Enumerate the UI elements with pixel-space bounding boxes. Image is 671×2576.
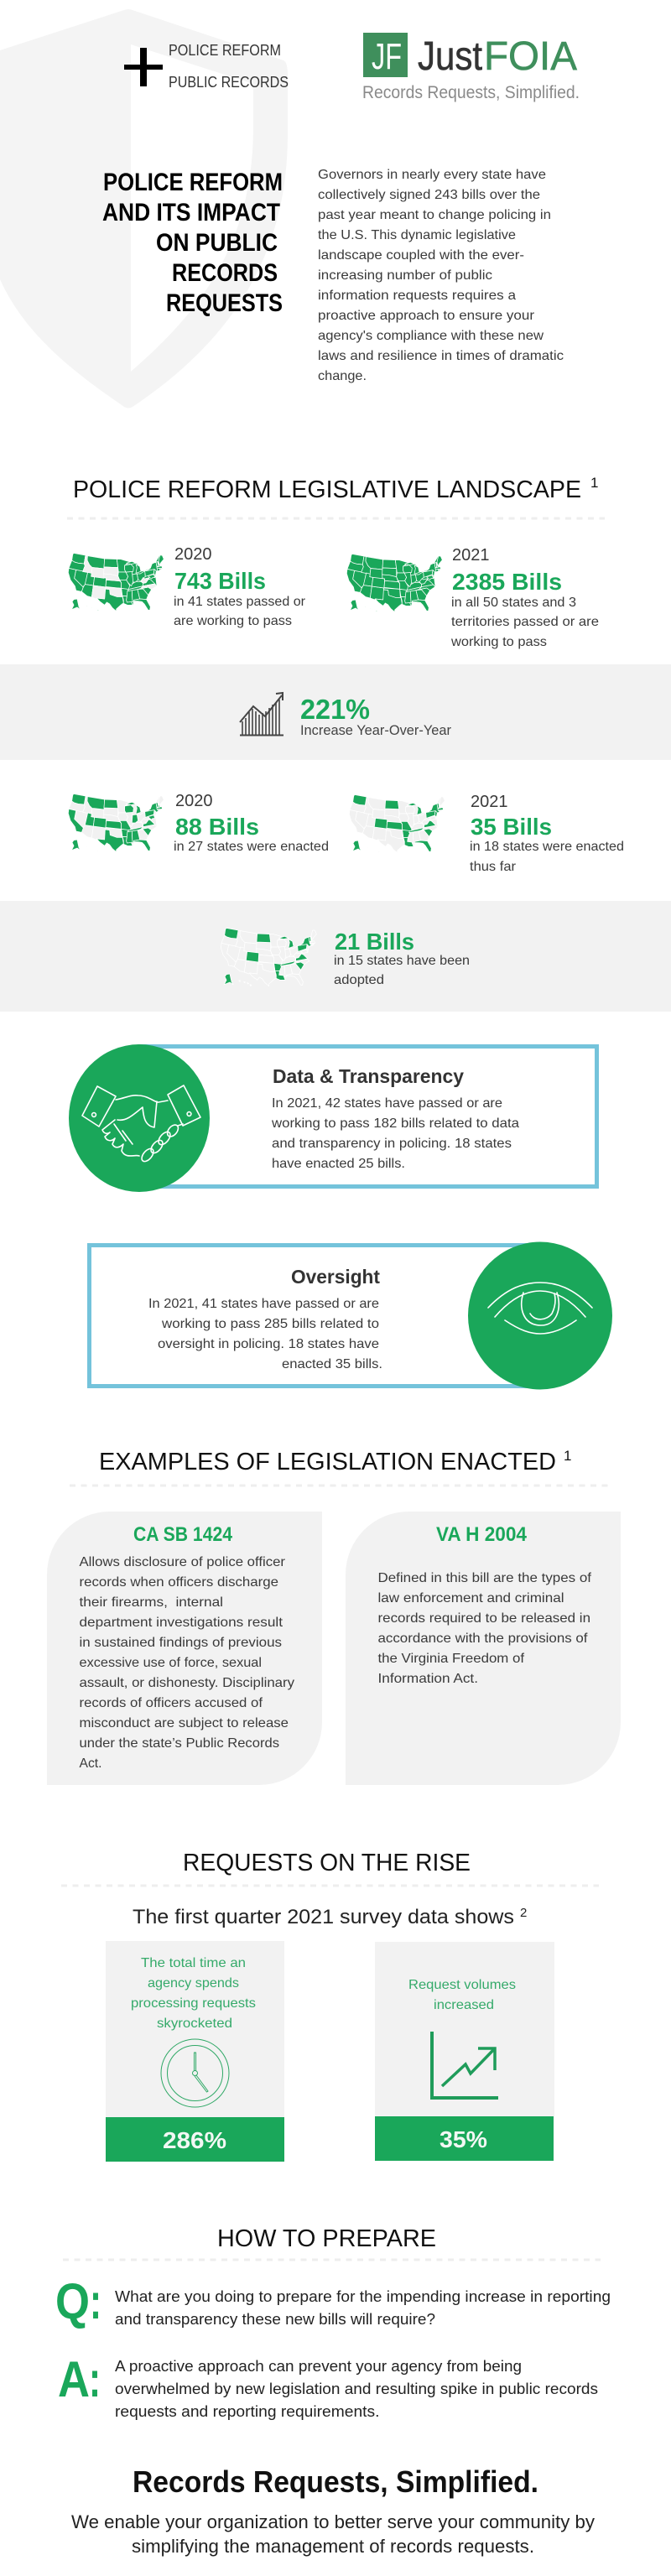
card text [79, 1555, 294, 1771]
intro text: landscape coupled with the ever- [318, 248, 524, 263]
icon: plus [124, 48, 163, 86]
icon: A letter: A [58, 2351, 90, 2407]
answer [58, 2351, 598, 2420]
card text: their firearms, internal [79, 1595, 223, 1610]
card text: records of officers accused of [79, 1696, 263, 1710]
title: POLICE REFORM [103, 169, 283, 196]
heading: Data & Transparency [273, 1065, 464, 1087]
value: 221% [300, 694, 370, 725]
value: 88 Bills [175, 814, 259, 840]
tagline: Records Requests, Simplified. [133, 2464, 538, 2499]
closing text [71, 2511, 595, 2557]
icon: Q letter: : [90, 2273, 101, 2329]
closing text: simplifying the management of records requests. [132, 2536, 534, 2557]
intro text: increasing number of public [318, 268, 492, 283]
card text: The total time an [141, 1956, 246, 1970]
card heading: CA SB 1424 [133, 1523, 233, 1546]
answer text: overwhelmed by new legislation and resulting spike in public records [115, 2381, 598, 2397]
value: 35% [440, 2126, 487, 2152]
subheading: survey data: 2 [520, 1906, 527, 1920]
closing statement [71, 2464, 595, 2557]
question text [115, 2288, 611, 2328]
card text: assault, or dishonesty. Disciplinary [79, 1676, 294, 1690]
card: CA SB 1424 [47, 1512, 322, 1785]
intro text: the U.S. This dynamic legislative [318, 228, 516, 242]
description: adopted [334, 973, 384, 987]
description: in 15 states have been [334, 954, 470, 968]
value: 743 Bills [174, 568, 266, 594]
card heading: VA H 2004 [436, 1523, 528, 1546]
card text: Defined in this bill are the types of [377, 1571, 592, 1585]
title: REQUESTS [166, 289, 283, 317]
tagline: Records Requests, Simplified. [362, 83, 580, 102]
description: In 2021, 41 states have passed or are [148, 1297, 379, 1311]
card text: department investigations result [79, 1616, 283, 1630]
icon: Q letter: Q [55, 2273, 90, 2329]
answer text: A proactive approach can prevent your agency from being [115, 2358, 522, 2375]
card text: skyrocketed [157, 2017, 232, 2031]
closing text: We enable your organization to better serve your community by [71, 2511, 595, 2532]
card text: Request volumes [408, 1978, 516, 1992]
label: public records: PUBLIC RECORDS [169, 74, 289, 91]
description: are working to pass [174, 614, 292, 628]
description: enacted 35 bills. [282, 1357, 382, 1371]
value: 286% [163, 2127, 226, 2153]
heading: requests on the rise: REQUESTS ON THE RISE [183, 1850, 471, 1876]
description: and transparency in policing. 18 states [272, 1137, 512, 1151]
title: RECORDS [172, 259, 278, 287]
intro text: agency's compliance with these new [318, 329, 544, 343]
description: in 18 states were enacted [470, 840, 624, 854]
wordmark: FOIA [484, 34, 577, 79]
card text: law enforcement and criminal [377, 1591, 564, 1605]
map: 2021 enacted [349, 794, 445, 853]
intro text: laws and resilience in times of dramatic [318, 349, 564, 363]
heading: Oversight [291, 1266, 380, 1288]
year: 2021 [471, 793, 508, 811]
value: 21 Bills [335, 929, 414, 955]
heading: legislative landscape: POLICE REFORM LEGISLATIVE LANDSCAPE [73, 476, 581, 503]
wordmark [418, 34, 577, 79]
value: 2385 Bills [452, 569, 562, 595]
card text: the Virginia Freedom of [377, 1652, 525, 1666]
description: In 2021, 42 states have passed or are [272, 1096, 502, 1111]
intro text: information requests requires a [318, 289, 516, 303]
heading: examples of legislation [70, 1448, 608, 1486]
caption: Increase Year-Over-Year [300, 722, 451, 738]
question [55, 2273, 611, 2329]
heading: legislative landscape [67, 475, 605, 518]
card text: in sustained findings of previous [79, 1636, 282, 1650]
subheading: survey data: The first quarter 2021 survey data shows [133, 1906, 514, 1928]
background shield watermark [0, 9, 288, 408]
description: in all 50 states and 3 [451, 596, 576, 610]
description: in 41 states passed or [174, 595, 306, 609]
label: police reform: POLICE REFORM [169, 42, 281, 59]
intro text: proactive approach to ensure your [318, 309, 535, 323]
wordmark: Just [418, 34, 482, 79]
heading: examples of legislation: 1 [564, 1448, 571, 1464]
description [470, 840, 624, 874]
description: oversight in policing. 18 states have [158, 1337, 379, 1351]
question text: What are you doing to prepare for the impending increase in reporting [115, 2288, 611, 2305]
intro text: past year meant to change policing in [318, 208, 551, 222]
icon: growth chart [432, 2032, 498, 2098]
icon: handshake on green circle [69, 1044, 210, 1192]
heading: how to prepare: HOW TO PREPARE [217, 2225, 436, 2252]
answer text [115, 2358, 598, 2420]
card text: accordance with the provisions of [377, 1631, 588, 1646]
answer text: requests and reporting requirements. [115, 2403, 379, 2420]
title: AND ITS IMPACT [102, 199, 280, 226]
stat: 2021 enacted [349, 793, 624, 874]
card text: records when officers discharge [79, 1575, 278, 1590]
intro text: change. [318, 369, 367, 383]
description: working to pass 182 bills related to data [271, 1116, 519, 1131]
header: plus and topics [124, 42, 289, 91]
map: 2020 passed or working [68, 553, 164, 611]
description: working to pass [450, 635, 547, 649]
title [102, 169, 283, 317]
year: 2021 [452, 546, 490, 565]
logo square [363, 33, 408, 77]
map: 2021 passed or working [346, 554, 442, 612]
intro text: Governors in nearly every state have [318, 168, 546, 182]
card text: misconduct are subject to release [79, 1716, 289, 1730]
description: have enacted 25 bills. [272, 1157, 405, 1171]
description [271, 1096, 519, 1171]
description: thus far [470, 860, 517, 874]
icon: rising bar chart [240, 693, 283, 736]
map: adopted [221, 928, 316, 986]
year: 2020 [174, 545, 211, 564]
card text [131, 1956, 256, 2031]
question text: and transparency these new bills will require? [115, 2311, 435, 2328]
heading: legislative landscape: 1 [590, 475, 598, 491]
description [148, 1297, 382, 1371]
card text [377, 1571, 592, 1686]
card text: increased [434, 1998, 494, 2012]
stat card: request volumes [375, 1942, 554, 2161]
card text [408, 1978, 516, 2012]
title: ON PUBLIC [156, 229, 278, 257]
panel: oversight [89, 1241, 612, 1389]
icon: clock [161, 2039, 229, 2107]
icon: eye on green circle [468, 1241, 612, 1389]
map: 2020 enacted [68, 794, 164, 852]
card text: under the state’s Public Records [79, 1736, 279, 1751]
card text: Information Act. [377, 1672, 478, 1686]
card: VA H 2004 [346, 1512, 621, 1785]
card text: excessive use of force, sexual [79, 1656, 262, 1670]
description [334, 954, 470, 987]
card text: Act. [79, 1756, 102, 1771]
intro text: collectively signed 243 bills over the [318, 188, 540, 202]
logo square: JF [372, 36, 402, 77]
description [450, 596, 599, 649]
stat card: time spent processing [106, 1941, 284, 2162]
card text: records required to be released in [377, 1611, 590, 1626]
stat: 2021 proposed bills [346, 546, 599, 649]
card text: processing requests [131, 1996, 256, 2011]
panel: data and transparency [69, 1044, 597, 1192]
JustFOIA logo [362, 33, 580, 102]
description: working to pass 285 bills related to [161, 1317, 379, 1331]
card text: agency spends [148, 1976, 239, 1991]
year: 2020 [175, 792, 213, 810]
band: adopted bills [0, 901, 671, 1012]
intro text [318, 168, 564, 383]
description: territories passed or are [451, 615, 599, 629]
description [174, 595, 306, 628]
value: 35 Bills [471, 814, 552, 840]
description: in 27 states were enacted [174, 840, 329, 854]
stat: 2020 enacted [68, 792, 329, 854]
stat: 2020 proposed bills [68, 545, 306, 628]
band: year-over-year increase [0, 664, 671, 760]
heading: examples of legislation: EXAMPLES OF LEGISLATION ENACTED [99, 1449, 556, 1475]
icon: A letter: : [89, 2351, 101, 2407]
card text: Allows disclosure of police officer [79, 1555, 286, 1569]
